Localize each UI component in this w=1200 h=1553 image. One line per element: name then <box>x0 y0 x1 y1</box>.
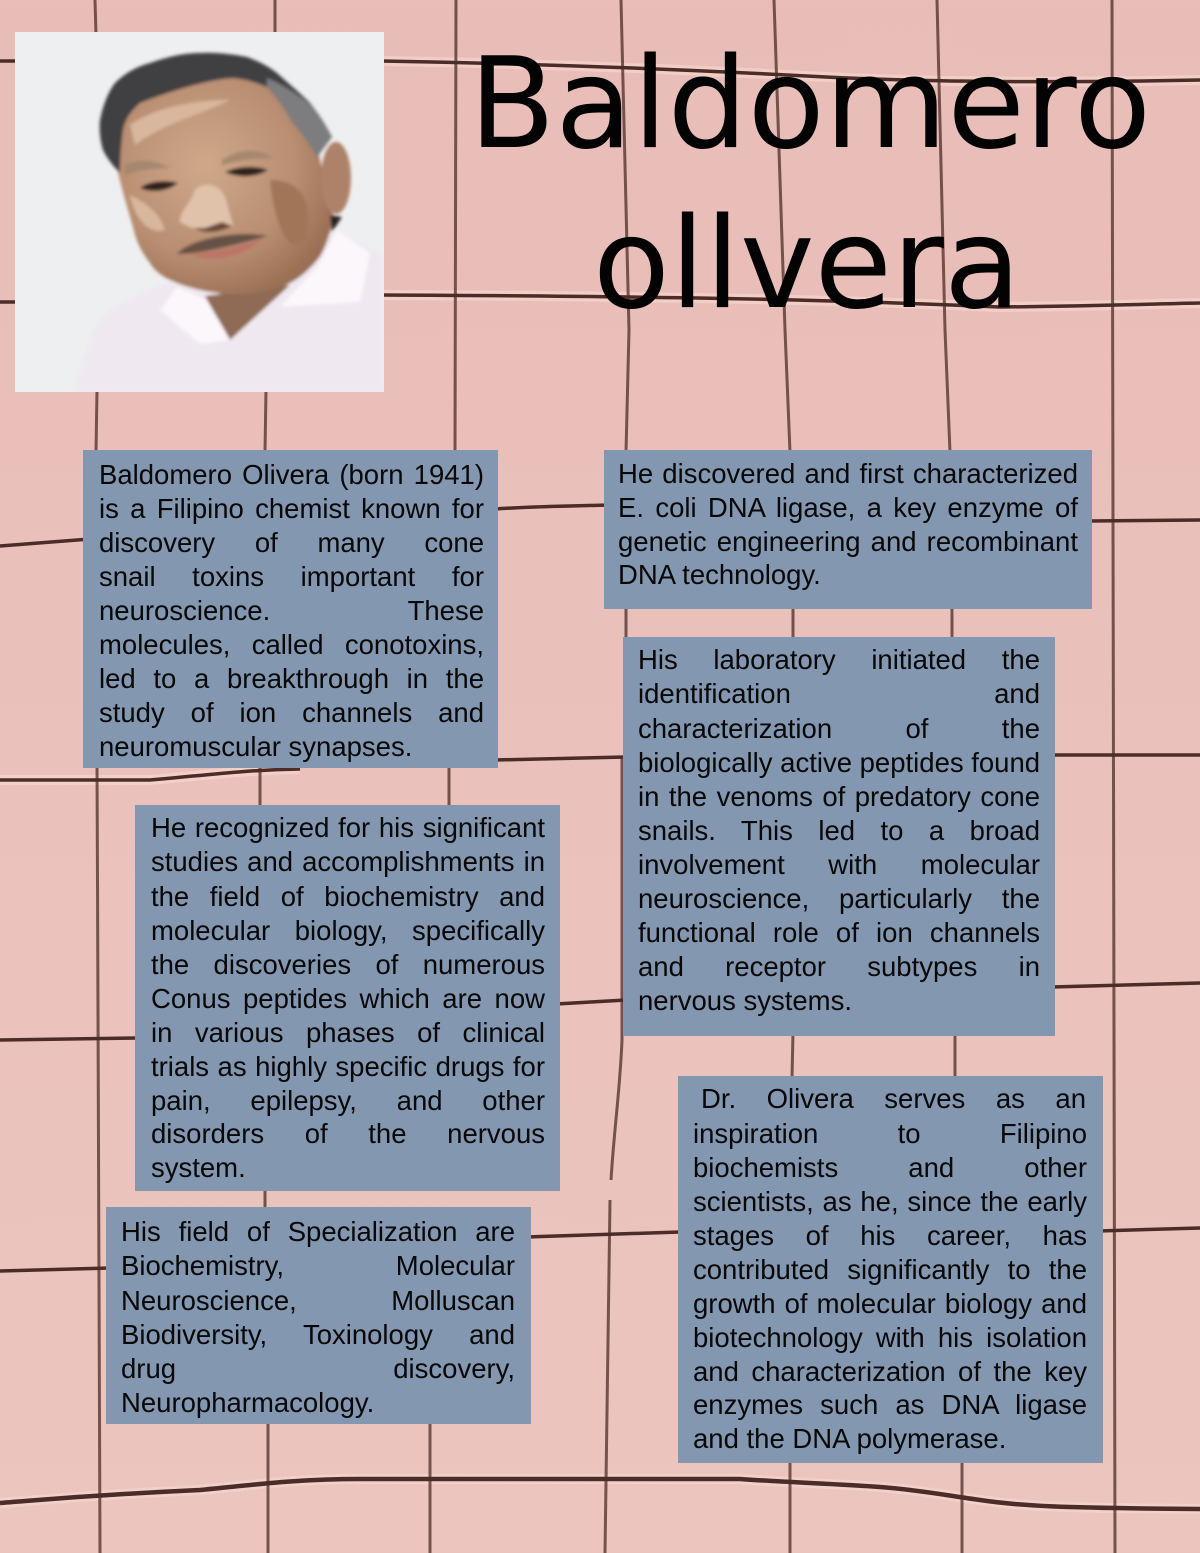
panel: inspiration to Filipino scientists: stages of his career, has <box>693 1220 1087 1251</box>
panel: inspiration to Filipino scientists: growth of molecular biology and <box>693 1288 1087 1319</box>
panel: field of specialization: drug discovery, <box>121 1353 515 1384</box>
panel: DNA ligase discovery: DNA technology. <box>618 559 821 590</box>
panel: cone snail venom research: identification and <box>638 678 1040 709</box>
panel: DNA ligase discovery: E. coli DNA ligase, a key enzyme of <box>618 492 1078 523</box>
panel: recognition and accomplishments: studies and accomplishments in <box>151 846 545 877</box>
panel: cone snail venom research: characterization of the <box>638 713 1040 744</box>
panel: biography introduction: snail toxins important for <box>99 561 484 592</box>
panel: recognition and accomplishments: the discoveries of numerous <box>151 949 545 980</box>
panel: biography introduction: discovery of many cone <box>99 527 484 558</box>
panel: field of specialization: Neuropharmacology. <box>121 1387 374 1418</box>
title <box>469 30 1151 337</box>
panel: cone snail venom research: biologically active peptides found <box>638 747 1040 778</box>
panel: inspiration to Filipino scientists: biochemists and other <box>693 1152 1087 1183</box>
panel: biography introduction: study of ion channels and <box>99 697 484 728</box>
panel: recognition and accomplishments: the field of biochemistry and <box>151 881 545 912</box>
panel: biography introduction: neuroscience. These <box>99 595 484 626</box>
title: Baldomero <box>469 30 1151 177</box>
panel: inspiration to Filipino scientists: and the DNA polymerase. <box>693 1423 1006 1454</box>
panel: recognition and accomplishments: in various phases of clinical <box>151 1017 545 1048</box>
panel: field of specialization: Neuroscience, Molluscan <box>121 1285 515 1316</box>
panel: biography introduction: molecules, called conotoxins, <box>99 629 484 660</box>
panel: cone snail venom research: snails. This led to a broad <box>638 815 1040 846</box>
panel: cone snail venom research: neuroscience, particularly the <box>638 883 1040 914</box>
panel: inspiration to Filipino scientists: inspiration to Filipino <box>693 1118 1087 1149</box>
panel: DNA ligase discovery <box>604 450 1092 609</box>
panel: cone snail venom research: functional role of ion channels <box>638 917 1040 948</box>
panel: inspiration to Filipino scientists: scientists, as he, since the early <box>693 1186 1087 1217</box>
panel: inspiration to Filipino scientists: Dr. Olivera serves as an <box>701 1083 1086 1114</box>
panel: field of specialization: Biodiversity, Toxinology and <box>121 1319 515 1350</box>
panel: recognition and accomplishments: system. <box>151 1152 246 1183</box>
panel: recognition and accomplishments: molecular biology, specifically <box>151 915 545 946</box>
panel: inspiration to Filipino scientists: biotechnology with his isolation <box>693 1322 1087 1353</box>
panel: cone snail venom research: in the venoms of predatory cone <box>638 781 1040 812</box>
panel: recognition and accomplishments: disorders of the nervous <box>151 1118 545 1149</box>
portrait photo of Baldomero Olivera <box>15 32 384 392</box>
panel: inspiration to Filipino scientists <box>678 1076 1103 1463</box>
panel: recognition and accomplishments: He recognized for his significant <box>151 812 545 843</box>
panel: recognition and accomplishments <box>135 805 560 1191</box>
panel: cone snail venom research: and receptor subtypes in <box>638 951 1040 982</box>
panel: biography introduction: Baldomero Olivera (born 1941) <box>99 459 484 490</box>
panel: field of specialization: His field of Specialization are <box>121 1216 515 1247</box>
panel: cone snail venom research: involvement with molecular <box>638 849 1040 880</box>
title: ollvera <box>593 190 1021 337</box>
panel: DNA ligase discovery: genetic engineering and recombinant <box>618 526 1078 557</box>
panel: cone snail venom research: His laboratory initiated the <box>638 644 1040 675</box>
panel: biography introduction <box>83 450 498 768</box>
panel: recognition and accomplishments: pain, epilepsy, and other <box>151 1085 545 1116</box>
panel: biography introduction: neuromuscular synapses. <box>99 731 412 762</box>
panel: field of specialization: Biochemistry, Molecular <box>121 1250 515 1281</box>
panel: inspiration to Filipino scientists: enzymes such as DNA ligase <box>693 1389 1087 1420</box>
panel: DNA ligase discovery: He discovered and first characterized <box>618 458 1078 489</box>
panel: cone snail venom research: nervous systems. <box>638 985 852 1016</box>
panel: biography introduction: is a Filipino chemist known for <box>99 493 484 524</box>
panel: recognition and accomplishments: trials as highly specific drugs for <box>151 1051 545 1082</box>
panel: inspiration to Filipino scientists: and characterization of the key <box>693 1356 1087 1387</box>
panel: biography introduction: led to a breakthrough in the <box>99 663 484 694</box>
panel: recognition and accomplishments: Conus peptides which are now <box>151 983 545 1014</box>
panel: field of specialization <box>106 1207 531 1424</box>
panel: cone snail venom research <box>623 637 1055 1036</box>
panel: inspiration to Filipino scientists: contributed significantly to the <box>693 1254 1087 1285</box>
